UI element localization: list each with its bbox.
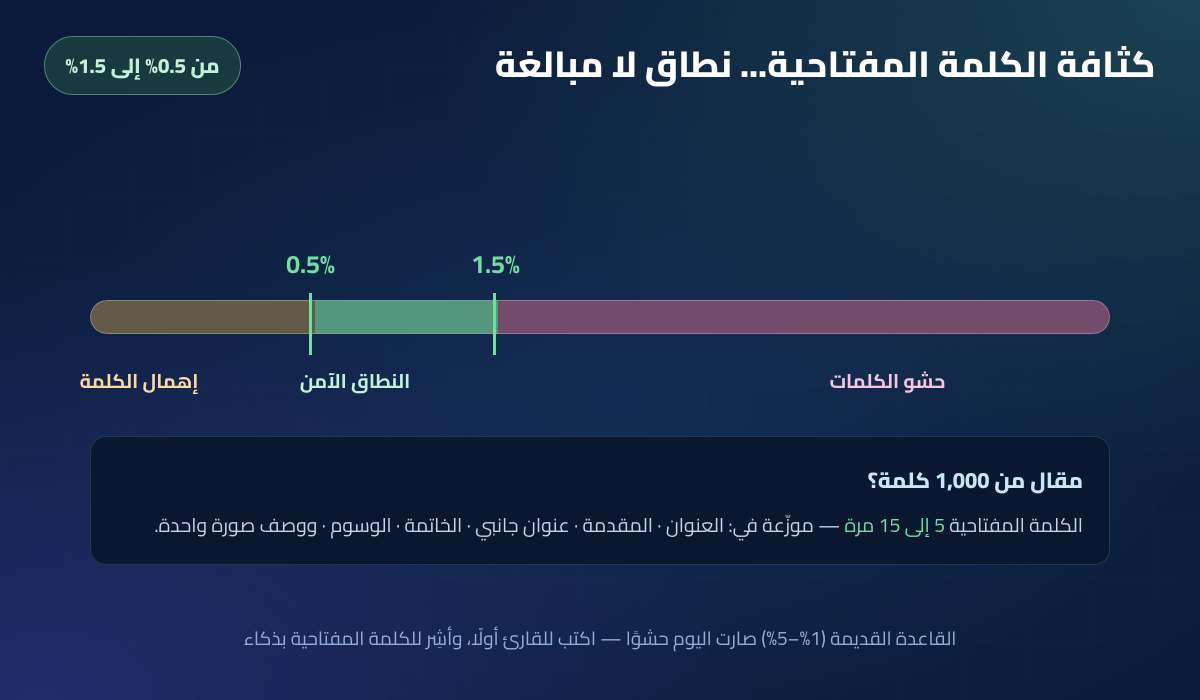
panel: 1000-word article	[90, 436, 1110, 565]
panel body text: الكلمة المفتاحية 5 إلى 15 مرة — موزّعة في: العنوان · المقدمة · عنوان جانبي · الخاتمة · الوسوم · ووصف صورة واحدة.	[154, 508, 1083, 544]
badge: range: من 0.5% إلى 1.5%	[65, 46, 220, 85]
marker label: 0.5%: 0.5%	[286, 241, 335, 288]
marker: 1.5%	[493, 293, 496, 355]
zone label: safe: النطاق الآمن	[300, 363, 410, 400]
title: كثافة الكلمة المفتاحية... نطاق لا مبالغة	[495, 30, 1156, 98]
marker: 0.5%	[309, 293, 312, 355]
segment: keyword stuffing	[498, 300, 1110, 334]
panel heading: مقال من 1,000 كلمة؟	[868, 459, 1083, 501]
badge: range	[44, 36, 241, 95]
segment: keyword neglect	[90, 300, 315, 334]
marker label: 1.5%: 1.5%	[471, 241, 520, 288]
density scale bar	[90, 300, 1110, 334]
footer note: القاعدة القديمة (1%–5%) صارت اليوم حشوًا — اكتب للقارئ أولًا، وأشِر للكلمة المفتاحية بذكاء	[244, 620, 956, 656]
segment: safe range	[315, 300, 498, 334]
zone label: neglect: إهمال الكلمة	[80, 363, 198, 400]
zone label: stuffing: حشو الكلمات	[830, 363, 945, 400]
